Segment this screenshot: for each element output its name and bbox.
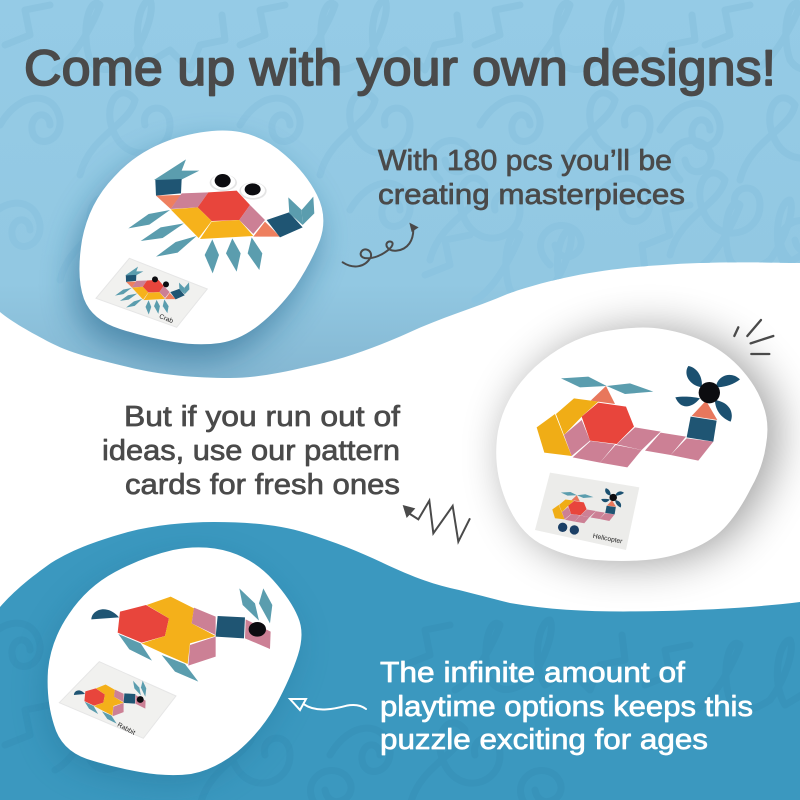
text block: 180 pcs: With 180 pcs you’ll be bbox=[378, 145, 672, 177]
pattern card: rabbit bbox=[59, 662, 176, 738]
icon: spark lines bbox=[734, 320, 773, 354]
arrow: curly to crab bbox=[343, 223, 419, 266]
pattern card: helicopter bbox=[535, 473, 639, 550]
title: Come up with your own designs! bbox=[24, 40, 776, 96]
text block: 180 pcs: creating masterpieces bbox=[378, 179, 685, 211]
panel: helicopter blob bbox=[496, 328, 767, 561]
pattern card: crab: Crab bbox=[158, 313, 174, 325]
bottom blue wave panel bbox=[0, 522, 800, 800]
text block: infinite playtime: playtime options keeps this bbox=[380, 691, 753, 723]
text block: pattern cards: cards for fresh ones bbox=[125, 469, 400, 501]
text block: infinite playtime bbox=[380, 657, 753, 756]
pattern card: rabbit: Rabbit bbox=[116, 722, 136, 737]
rabbit puzzle figure bbox=[91, 588, 272, 682]
text block: 180 pcs bbox=[378, 145, 685, 211]
pattern card: crab bbox=[96, 258, 207, 327]
crab eyes bbox=[210, 174, 267, 200]
helicopter blob cast shadow on band bbox=[506, 330, 777, 563]
helicopter puzzle figure bbox=[537, 366, 740, 467]
pattern card: helicopter: Helicopter bbox=[592, 533, 624, 546]
text block: pattern cards: ideas, use our pattern bbox=[102, 435, 400, 467]
arrow: white to rabbit bbox=[290, 699, 366, 710]
arrow: zigzag to text bbox=[403, 501, 470, 542]
top blue wave panel bbox=[0, 0, 800, 378]
text block: infinite playtime: puzzle exciting for ages bbox=[380, 724, 708, 756]
text block: pattern cards: But if you run out of bbox=[124, 401, 400, 433]
panel: crab blob bbox=[79, 130, 323, 344]
crab puzzle figure bbox=[128, 159, 314, 273]
text block: infinite playtime: The infinite amount of bbox=[380, 657, 685, 689]
panel: rabbit blob bbox=[48, 547, 301, 775]
text block: pattern cards bbox=[102, 401, 400, 501]
